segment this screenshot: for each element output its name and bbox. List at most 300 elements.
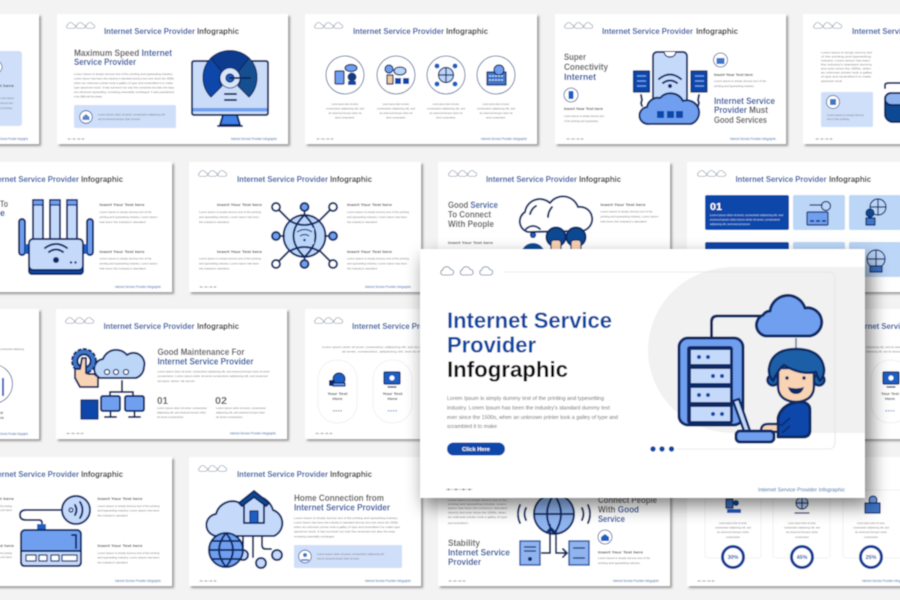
stat card 45%: do eiusmod tempor dolor (786, 530, 818, 534)
slide: partial left row 3 (0, 309, 41, 441)
slide: stability: Internet Service Provider Infographic (613, 579, 659, 583)
text blocks left (199, 203, 262, 270)
hand (761, 424, 778, 432)
slide: maximum speed: Internet Service Provider Infographic (231, 137, 277, 141)
side heading: Provider Must (714, 105, 768, 115)
slide: four circles (305, 14, 539, 146)
heading: Service Provider (74, 57, 136, 67)
stat card 30%: 30% (728, 555, 739, 561)
stat card 25%: do eiusmod tempor dolor (855, 530, 887, 534)
lorem column: specimen book (821, 79, 843, 83)
text blocks: Insert Your Text here (98, 497, 142, 501)
captions: consectetur adipiscing elit, sed (427, 106, 465, 110)
body text: when an unknown printer took a galley of type and scrambled it to make (74, 81, 173, 85)
icon circle 2 (377, 56, 415, 94)
laptop screen (733, 399, 750, 431)
heading right: Connect People (598, 495, 657, 505)
callout: Lorem ipsum dolor sit amet, consectetur adipiscing elit (317, 552, 384, 556)
text blocks left: the industry's standard (199, 220, 229, 224)
icon: router (19, 200, 93, 274)
slide: network globe: Infographic (330, 174, 372, 184)
pill 1: Your Text (328, 392, 348, 396)
button: Click Here (462, 447, 490, 453)
body text (294, 516, 400, 538)
stat card 30%: do eiusmod tempor dolor (717, 530, 749, 534)
slide: modem (0, 457, 174, 588)
heading left: Internet Service (448, 548, 510, 558)
stat card 25%: Lorem ipsum dolor sit amet, (857, 521, 885, 525)
lorem column: Lorem Ipsum is simply dummy text (821, 50, 872, 54)
slide: partial left row 1: of printing (0, 106, 12, 110)
icon badge (598, 530, 612, 544)
slide: partial left row 1: Lorem ipsum (0, 96, 14, 100)
stat 02: sit amet consectetur. (216, 415, 243, 419)
stat card 45%: 45% (797, 555, 808, 561)
slide: four circles: Internet Service Provider Infographic (481, 137, 527, 141)
stat 01: Lorem ipsum dolor sit amet, consectetur (157, 406, 207, 410)
tile globe person (849, 195, 900, 230)
stat card 45% (773, 490, 830, 568)
slide: partial mouse right row 1 (803, 14, 900, 146)
footer text: Internet Service Provider Infographic (758, 488, 846, 494)
icon: home cloud globe (206, 491, 282, 568)
body text: specimen book. It has survived not only five centuries but also the leap (294, 530, 395, 534)
text blocks right: and typesetting industry. Lorem Ipsum has been (347, 262, 407, 266)
tile 01: Lorem ipsum dolor sit amet, consectetur adipiscing elit, sed (710, 213, 783, 217)
text blocks left: Insert Your Text here (217, 203, 262, 207)
stat 01: adipiscing elit, sed eiusmod tempor dolor (157, 410, 206, 414)
slide: numbered tiles: Internet Service Provider (736, 174, 827, 184)
slide: good maintenance: Infographic (197, 321, 239, 331)
body text: type specimen book. It has survived not only five centuries but also the leap (74, 86, 174, 90)
stat 01: sit amet consectetur. (157, 415, 184, 419)
body text (74, 72, 175, 98)
laptop base (736, 431, 774, 442)
text blocks right: Insert Your Text here (347, 250, 392, 254)
pill 1: Here (332, 397, 342, 401)
lorem column: of the printing and typesetting (821, 54, 872, 58)
icon badge right (714, 53, 728, 67)
heading (448, 200, 498, 229)
pill: Here (885, 397, 895, 401)
stat card 30%: consectetur (726, 535, 740, 539)
icon: phone wifi cloud (634, 52, 707, 124)
heading (158, 347, 254, 366)
slide: maximum speed: Internet Service Provider (104, 26, 196, 36)
slide: stability: printing and typesetting industry (598, 561, 641, 565)
cable (795, 338, 797, 350)
text blocks: the industry's standard (98, 514, 128, 518)
heading right: With Good (598, 504, 639, 514)
slide: home connection (189, 457, 423, 588)
body text: into electronic typesetting, remaining essentially unchanged. It was popularised (74, 90, 174, 94)
slide: numbered tiles (687, 162, 900, 294)
heading (74, 48, 172, 67)
slide: good service (438, 162, 672, 294)
heading: To Connect (448, 210, 491, 220)
callout: Lorem ipsum dolor sit amet, consectetur adipiscing elit (98, 112, 165, 116)
stat 02: adipiscing elit, sed eiusmod tempor dolor (216, 410, 265, 414)
left body text: dummy text ever since the 1500s, when (448, 510, 506, 514)
icon: mouse (885, 83, 900, 122)
slide: pills: Internet Service Provider (352, 321, 444, 331)
text block top: printing and typesetting industry. Lorem Ipsum (100, 215, 158, 219)
title: Internet Service (447, 308, 612, 333)
callout: sed do eiusmod tempor dolor sit amet (317, 556, 359, 560)
slide: super connectivity: Lorem Ipsum is simply dummy text (564, 114, 604, 118)
heading: Super (564, 52, 586, 62)
slide: modem: Internet Service Provider Infographic (115, 579, 161, 583)
grey backdrop (648, 267, 865, 433)
pill 1 (318, 360, 357, 423)
frame line (504, 272, 835, 449)
pagination dots (650, 446, 674, 452)
icon: modem (20, 496, 90, 566)
tile 01: adipiscing elit, sed eiusmod ipsum (710, 222, 751, 226)
text blocks left: the industry's standard (199, 266, 229, 270)
body text: industry. Lorem Ipsum has been the industry's standard dummy text (447, 406, 611, 412)
lorem column: text ever since the 1500s, when (821, 66, 871, 70)
text blocks left: Lorem Ipsum is simply dummy text of the printing (199, 256, 261, 260)
partial labels: Lorem Ipsum (0, 555, 12, 559)
slide: good service: Internet Service Provider (486, 174, 578, 184)
callout: text of the printing (827, 117, 849, 121)
title: Provider (447, 332, 536, 358)
text blocks: Lorem Ipsum is simply dummy text of the printing (98, 551, 160, 555)
slide: numbered tiles: Infographic (829, 174, 871, 184)
hair (769, 349, 824, 381)
body text: Lorem Ipsum is simply dummy text of the printing and typesetting industry. (74, 72, 173, 76)
captions: amet consectetur. (486, 116, 506, 120)
body text: Lorem Ipsum is simply dummy text of the printing and typesetting (447, 396, 604, 402)
text blocks: the industry's standard (98, 560, 128, 564)
body text: scrambled it to make (447, 424, 497, 430)
partial labels: Lorem Ipsum (0, 508, 12, 512)
text blocks right: Insert Your Text here (347, 203, 392, 207)
heading left: Provider (448, 557, 481, 567)
body text: Lorem Ipsum has been the industry's standard dummy text ever since the 1500s (74, 76, 175, 80)
captions: consectetur adipiscing elit, sed (377, 106, 415, 110)
lorem column: of type and scrambled it to make (821, 74, 871, 78)
heading right (598, 495, 657, 524)
slide: good maintenance (56, 309, 289, 441)
slide: partial left row 1 (0, 14, 41, 146)
captions: do eiusmod tempor dolor sit (430, 111, 463, 115)
body text: Lorem Ipsum has been the industry's standard dummy text ever since the 1500s (294, 520, 399, 524)
slide: partial left row 1: dummy text (0, 101, 13, 105)
slide: modem: Infographic (81, 469, 123, 479)
icon: network globe (272, 203, 337, 268)
button (447, 442, 505, 456)
left body text (448, 498, 507, 525)
text block top: has been the industry's standard (100, 220, 146, 224)
cloud (756, 295, 822, 336)
side heading: Internet Service (714, 96, 775, 106)
body text: ever since the 1500s, when an unknown printer took a galley of type and (447, 415, 618, 421)
partial heading (0, 199, 8, 218)
main slide shadow (424, 257, 871, 506)
heading: Good Service (448, 200, 498, 210)
slide: pills: sit amet, consectetur, adipiscing elit, sed do eiusmod (342, 350, 433, 354)
stat card 45%: consectetur (795, 535, 809, 539)
slide: network globe: Internet Service Provider (237, 174, 329, 184)
text blocks right: Lorem Ipsum is simply dummy text of the printing (347, 210, 409, 214)
body text: in the 1960s with the release (74, 94, 102, 98)
slide: super connectivity: Lorem Ipsum is simply dummy text of the (714, 79, 766, 83)
slide: maximum speed (57, 14, 290, 146)
body text (158, 370, 270, 383)
body text: Lorem ipsum dolor sit amet, consectetur adipiscing elit, sed eiusmod tempor dolor sit amet (158, 370, 270, 374)
slide: home connection: Infographic (330, 469, 372, 479)
slide: good service: Insert Your Text here (448, 241, 493, 245)
slide: four circles: Internet Service Provider (353, 26, 445, 36)
icon circle 1 (326, 56, 364, 94)
heading: Good Maintenance For (158, 347, 245, 357)
stat card 25%: consectetur adipiscing elit, sed (853, 526, 889, 530)
icon circle 3 (427, 56, 465, 94)
side heading: Good Services (714, 115, 767, 125)
callout (74, 105, 176, 128)
text block: Insert Your Text here (600, 203, 646, 207)
lorem column (821, 50, 873, 83)
text blocks right (347, 203, 409, 270)
stat 02: 02 (215, 396, 227, 407)
text blocks left: Lorem Ipsum is simply dummy text of the printing (199, 210, 261, 214)
left body text: an unknown printer took a galley of type (448, 515, 507, 519)
pill 2 (373, 360, 412, 423)
body text: when an unknown printer took a galley of type and scrambled it to make type (294, 525, 400, 529)
pill 2: Here (388, 397, 398, 401)
slide: home connection: Internet Service Provider Infographic (365, 579, 411, 583)
slide: super connectivity: Insert Your Text here (714, 73, 753, 77)
text block (600, 203, 659, 224)
person body (778, 402, 810, 437)
heading: Maximum Speed Internet (74, 48, 172, 58)
slide: super connectivity: Internet Service Provider Infographic (730, 137, 776, 141)
callout: Lorem ipsum is simply dummy (827, 113, 865, 117)
left body text: Lorem Ipsum is simply dummy text of the (448, 498, 507, 502)
stat card 25%: 25% (866, 555, 877, 561)
face (778, 368, 814, 402)
body text (447, 396, 618, 430)
ears (768, 374, 778, 386)
slide: super connectivity (555, 14, 788, 146)
body text: tempor dolor sit amet (158, 379, 195, 383)
icon circle 4 (477, 56, 515, 94)
heading: Internet Service Provider (294, 502, 390, 512)
left body text: Ipsum has been the industry's standard (448, 506, 507, 510)
icon badge (564, 88, 578, 102)
slide: super connectivity: of the printing and typesetting (564, 119, 598, 123)
slide: super connectivity: Internet Service Provider (602, 26, 694, 36)
eyes and smile (785, 376, 789, 380)
body text: consectetur, Lorem ipsum dolor sit amet consectetur adipiscing elit, sed eiusmod (158, 374, 268, 378)
captions: consectetur adipiscing elit, sed (326, 106, 364, 110)
slide: partial left row 3: xt (0, 411, 4, 415)
text block: Lorem Ipsum is simply dummy text of the (600, 210, 653, 214)
text blocks: and typesetting industry. Lorem Ipsum has been (98, 508, 160, 512)
tile 01: eiusmod ipsum dolor ipsum dolor sit amet, consectetur (710, 218, 780, 222)
slide: good maintenance: Internet Service Provider Infographic (230, 432, 276, 436)
slide: percent stats (687, 457, 900, 588)
text blocks right: and typesetting industry. Lorem Ipsum has been (347, 215, 407, 219)
heading left: Stability (448, 538, 480, 548)
body text: remaining essentially unchanged (294, 534, 334, 538)
text blocks: and typesetting industry. Lorem Ipsum has been (98, 556, 160, 560)
text blocks: Insert Your Text here (98, 544, 142, 548)
pill 2: ●●●● (387, 409, 398, 413)
stat 01: 01 (157, 396, 168, 407)
partial heading: e (0, 208, 5, 218)
icon: three clouds (441, 267, 493, 275)
tile 01: 01 (710, 202, 722, 213)
pill 2: Your Text (382, 392, 403, 396)
text blocks left: and typesetting industry. Lorem Ipsum has been (199, 215, 259, 219)
slide: stability: Insert Your Text here (598, 550, 643, 554)
callout (294, 545, 402, 568)
heading: Internet Service Provider (158, 356, 254, 366)
stat 01 (157, 396, 207, 419)
slide: partial left row 1: t here (0, 84, 14, 88)
text block top (100, 203, 158, 224)
heading left (448, 538, 510, 567)
partial labels (0, 497, 14, 559)
text block bottom: Insert Your Text here (100, 250, 144, 254)
heading: Conectivity (564, 62, 608, 72)
stat 02: Lorem ipsum dolor sit amet, consectetur (216, 406, 266, 410)
slide: stability: Lorem Ipsum is simply dummy text of the (598, 556, 650, 560)
stat card 25% (843, 490, 900, 568)
partial labels: t here (0, 497, 14, 501)
partial labels: the printing (0, 504, 12, 508)
tile router (793, 195, 845, 230)
slide: pills (305, 309, 539, 441)
left body text: and scrambled it (448, 521, 468, 525)
heading: Home Connection from (294, 493, 384, 503)
main slide (420, 249, 865, 498)
text blocks right: the industry's standard (347, 220, 377, 224)
text block top: Lorem Ipsum is simply dummy text of the (100, 210, 152, 214)
body text: Lorem Ipsum is simply dummy text of the printing and typesetting industry. (294, 516, 398, 520)
title (447, 308, 612, 382)
callout: sed do eiusmod tempor dolor sit amet (98, 117, 140, 121)
stat card 30%: consectetur adipiscing elit, sed (715, 526, 751, 530)
tile 02 (705, 242, 789, 277)
tile row 2 (793, 242, 900, 277)
slide: pills: Lorem ipsum dolor sit amet, consectetur, adipiscing elit, sed do eiusmod (322, 345, 432, 349)
slide: maximum speed: Infographic (197, 26, 239, 36)
stat card 30% (705, 490, 761, 568)
pill: ●●●● (885, 409, 895, 413)
icon: cloud people (520, 196, 592, 267)
text blocks left: and typesetting industry. Lorem Ipsum has been (199, 262, 259, 266)
tile 01 (705, 195, 789, 230)
stat card 45%: Lorem ipsum dolor sit amet, (788, 521, 816, 525)
captions: Lorem ipsum dolor sit amet, (382, 102, 410, 106)
lorem column: the industry's standard dummy (821, 62, 873, 66)
title: Infographic (447, 357, 568, 382)
slide: partial left row 3: consectetur adipiscing (0, 347, 24, 351)
text blocks: Lorem Ipsum is simply dummy text of the printing (98, 504, 160, 508)
slide: network globe: Internet Service Provider Infographic (365, 285, 411, 289)
partial labels: the printing (0, 551, 12, 555)
pill: Your Text (881, 392, 900, 396)
stat 02 (215, 396, 266, 419)
slide: good service: Infographic (579, 174, 621, 184)
icon: monitor speedometer (192, 51, 268, 126)
slide: partial left row 3: re (0, 416, 4, 420)
server (679, 338, 743, 425)
captions (326, 102, 515, 120)
lorem column: industry. Lorem Ipsum has been (821, 58, 870, 62)
text block: has been the industry's standard (600, 220, 647, 224)
footer dots (446, 488, 472, 491)
text blocks right: the industry's standard (347, 266, 377, 270)
slide: router: Internet Service Provider Infographic (115, 285, 161, 289)
text block: printing and typesetting industry. Lorem Ipsum (600, 214, 659, 218)
captions: do eiusmod tempor dolor sit (480, 111, 513, 115)
slide: home connection: Internet Service Provider (237, 469, 329, 479)
text block bottom: has been the industry's standard (100, 266, 146, 270)
side heading (714, 96, 775, 125)
partial heading: To (0, 199, 8, 209)
stat card 45%: consectetur adipiscing elit, sed (784, 526, 820, 530)
text block bottom (100, 250, 158, 270)
captions: consectetur adipiscing elit, sed (477, 106, 515, 110)
slide: partial pills right (800, 309, 900, 441)
text block bottom: printing and typesetting industry. Lorem Ipsum (100, 262, 158, 266)
heading (564, 52, 608, 82)
partial labels: d here (0, 544, 14, 548)
slide: stability (438, 457, 672, 588)
slide: good maintenance: Internet Service Provider (104, 321, 195, 331)
text block bottom: Lorem Ipsum is simply dummy text of the (100, 256, 152, 260)
captions: Lorem ipsum dolor sit amet, (432, 102, 460, 106)
slide: super connectivity: Insert Your Text here (564, 107, 603, 111)
captions: amet consectetur. (436, 116, 456, 120)
slide: super connectivity: Infographic (696, 26, 738, 36)
captions: do eiusmod tempor dolor sit (380, 111, 413, 115)
captions: Lorem ipsum dolor sit amet, (482, 102, 510, 106)
stat card 25%: consectetur (864, 535, 878, 539)
text blocks right: Lorem Ipsum is simply dummy text of the printing (347, 256, 409, 260)
arm (767, 418, 790, 433)
illustration: person at server with cloud (679, 295, 824, 442)
heading (294, 493, 390, 512)
slide: router (0, 162, 174, 294)
heading: Internet (564, 72, 596, 82)
slide: network globe (189, 162, 423, 294)
icon: hand gear cloud (72, 349, 144, 419)
left body text: printing and typesetting industry. Lorem (448, 502, 507, 506)
captions: amet consectetur. (335, 116, 355, 120)
captions: Lorem ipsum dolor sit amet, (332, 102, 359, 106)
pill (871, 360, 900, 423)
slide: router: Infographic (81, 174, 123, 184)
slide: super connectivity: printing and typesetting industry (714, 84, 755, 88)
heading right: Service (598, 514, 625, 524)
captions: amet consectetur. (386, 116, 406, 120)
icon: globe servers (518, 494, 590, 565)
lorem column: an unknown printer took a galley (821, 70, 873, 74)
callout (821, 92, 873, 127)
heading: With People (448, 219, 494, 229)
text blocks (98, 497, 160, 564)
text blocks left: Insert Your Text here (217, 250, 262, 254)
slide: four circles: Infographic (446, 26, 488, 36)
stat card 30%: Lorem ipsum dolor sit amet, (719, 521, 747, 525)
text block top: Insert Your Text here (100, 203, 144, 207)
